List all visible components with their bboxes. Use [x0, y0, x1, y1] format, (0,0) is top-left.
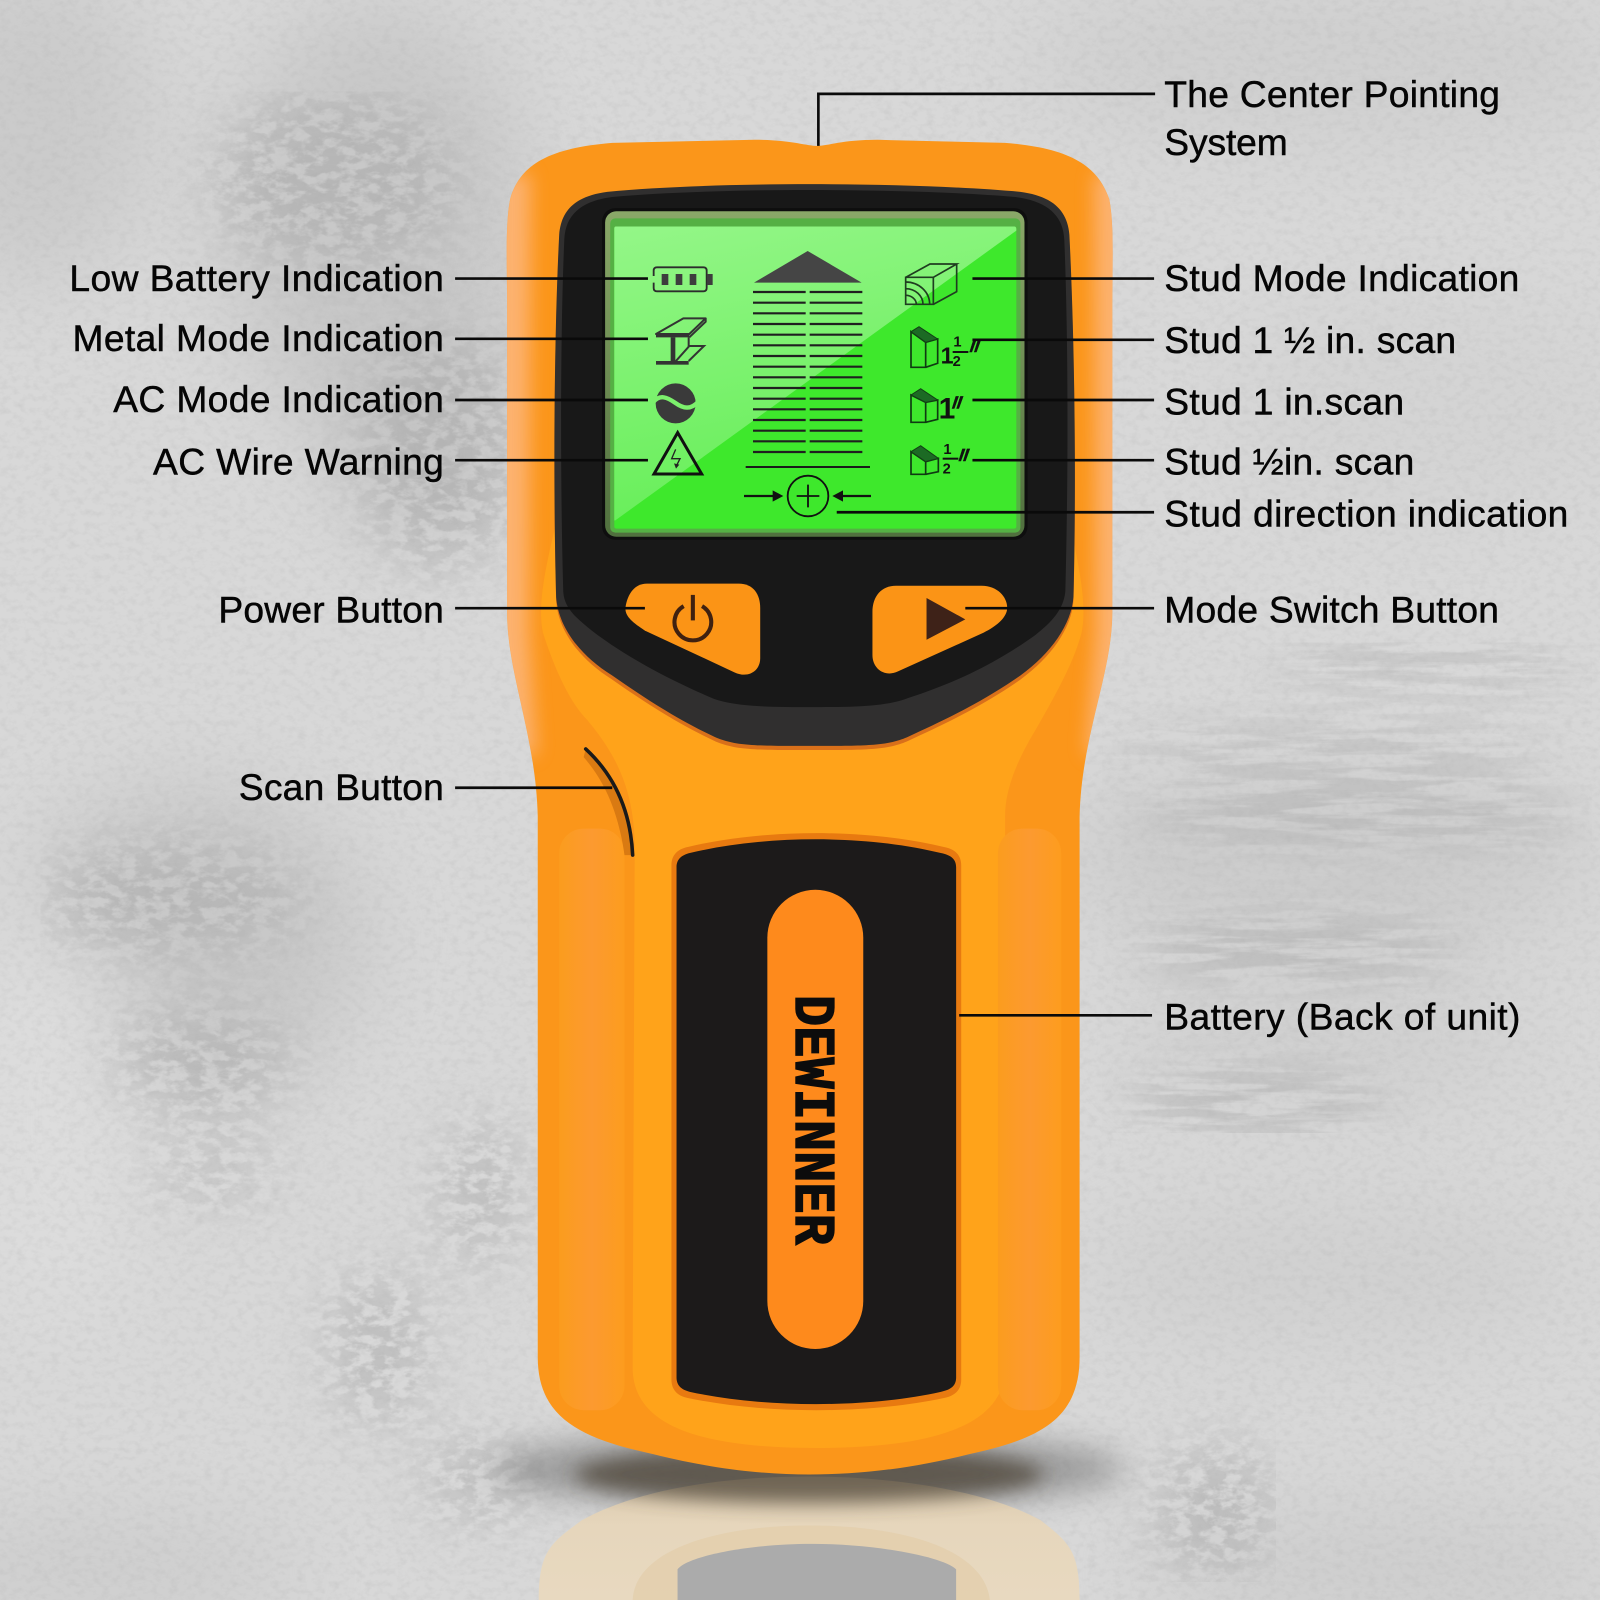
- label: power button: Power Button: [218, 588, 444, 630]
- label: AC wire warning: AC Wire Warning: [153, 440, 444, 482]
- icon: stud 1 1/2 inch: 2: [953, 354, 961, 370]
- label: mode switch: Mode Switch Button: [1164, 588, 1499, 630]
- label: center pointing system: System: [1164, 121, 1288, 163]
- label: stud 1/2: Stud ½in. scan: [1164, 440, 1414, 482]
- labels right: [1164, 73, 1568, 1038]
- icon: stud 1 inch: ": [942, 387, 966, 441]
- icon: stud 1 1/2 inch: 1: [953, 335, 961, 351]
- display bezel: [554, 184, 1075, 750]
- mode switch button: [872, 586, 1007, 673]
- icon: warning triangle: [654, 433, 702, 474]
- signal strength bars: [753, 292, 862, 452]
- device body: [507, 140, 1113, 1474]
- label: low battery: Low Battery Indication: [69, 257, 444, 299]
- left side grip: [559, 829, 624, 1410]
- label: metal mode: Metal Mode Indication: [72, 317, 444, 359]
- label: AC mode: AC Mode Indication: [113, 378, 444, 420]
- stud finder device: [490, 140, 1131, 1474]
- icon: play triangle: [927, 598, 965, 640]
- icon: stud 1/2 inch: ": [948, 439, 973, 493]
- icon: battery: [654, 267, 713, 291]
- label: battery: Battery (Back of unit): [1164, 996, 1520, 1038]
- label: stud mode: Stud Mode Indication: [1164, 257, 1519, 299]
- right side grip: [998, 829, 1061, 1410]
- icon: stud 1/2 inch: 1: [943, 442, 951, 458]
- icon: stud 1 1/2 inch: [911, 327, 984, 384]
- icon: stud 1/2 inch: [911, 439, 973, 493]
- label: stud 1 1/2: Stud 1 ½ in. scan: [1164, 319, 1456, 361]
- bars baseline: [746, 464, 870, 470]
- icon: stud wood block: [906, 264, 957, 304]
- icon: stud 1 1/2 inch: ": [959, 330, 984, 384]
- brand name: DEWINNER: [778, 995, 843, 1246]
- icon: stud 1 inch: [911, 387, 966, 441]
- label: stud 1: Stud 1 in.scan: [1164, 380, 1404, 422]
- icon: metal I-beam: [656, 318, 706, 365]
- LCD screen: [602, 208, 1028, 540]
- pale edge glow: [490, 173, 1131, 755]
- icon: AC wave: [653, 383, 698, 423]
- device shadow: [493, 1431, 1126, 1508]
- direction arrow head: [754, 251, 862, 283]
- scan button: [584, 749, 633, 855]
- icon: center target with arrows: [744, 476, 871, 516]
- orange logo pill: [767, 890, 863, 1349]
- icon: power symbol: [674, 595, 711, 640]
- label: center pointing system: The Center Pointing: [1164, 73, 1500, 115]
- label: center pointing system: [1164, 73, 1500, 163]
- power button: [625, 584, 760, 675]
- icon: stud 1 inch: 1: [939, 393, 955, 426]
- icon: stud 1/2 inch: 2: [943, 461, 951, 477]
- leader lines: [455, 94, 1155, 1015]
- label: stud direction: Stud direction indication: [1164, 493, 1568, 535]
- battery cover panel: [671, 833, 961, 1410]
- labels left: [69, 257, 444, 808]
- raised centre of body: [541, 510, 1083, 1448]
- label: scan button: Scan Button: [239, 766, 444, 808]
- device reflection: [539, 1446, 1080, 1600]
- icon: stud 1 1/2 inch: 1: [941, 342, 954, 368]
